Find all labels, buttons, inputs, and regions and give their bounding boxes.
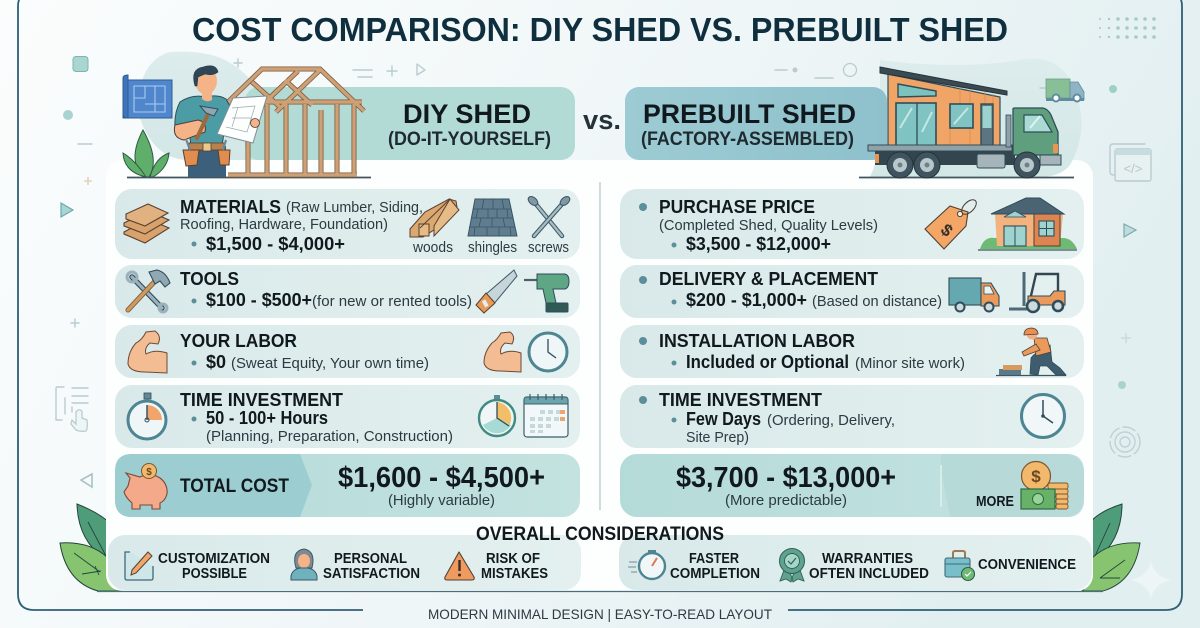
heading: installation: INSTALLATION LABOR	[659, 331, 855, 351]
panel: total cost DIY	[115, 454, 580, 517]
heading: materials: MATERIALS	[180, 197, 281, 217]
text: days detail 2: Site Prep)	[686, 430, 749, 446]
value: installation: Included or Optional	[686, 352, 849, 372]
value: labor: $0	[206, 352, 226, 372]
text: installation detail: (Minor site work)	[855, 356, 965, 372]
heading: overall considerations: OVERALL CONSIDERATIONS	[476, 524, 724, 545]
label: satisfaction: SATISFACTION	[323, 566, 420, 582]
panel: tools	[115, 265, 580, 318]
icon: forklift	[1009, 272, 1065, 312]
text: delivery detail: (Based on distance)	[812, 294, 942, 310]
bullet	[192, 360, 196, 366]
bullet	[672, 242, 676, 248]
vs label: vs.	[583, 105, 621, 135]
icon: small truck	[1040, 79, 1084, 102]
bullet	[192, 416, 196, 422]
label: faster: FASTER	[689, 551, 739, 567]
panel: time investment DIY	[115, 385, 580, 448]
heading: DIY: DIY SHED	[403, 99, 531, 129]
decorative icons right: </>	[1124, 161, 1142, 176]
center divider	[599, 182, 601, 510]
icon: lumber stack	[124, 204, 169, 243]
white content panel	[106, 160, 1093, 591]
icon: calendar	[524, 394, 568, 437]
icon: wrench and hammer	[127, 270, 170, 312]
label: shingles: shingles	[468, 240, 517, 256]
icon: money	[1021, 462, 1068, 509]
label: more: MORE	[976, 494, 1014, 510]
icon: truck	[868, 108, 1061, 178]
value: prebuilt total: $3,700 - $13,000+	[676, 462, 896, 494]
label: mistakes: MISTAKES	[481, 566, 548, 582]
icon: plant	[123, 130, 169, 177]
icon: blueprint	[123, 75, 172, 118]
text: labor detail: (Sweat Equity, Your own time)	[231, 356, 429, 372]
heading: delivery: DELIVERY & PLACEMENT	[659, 269, 878, 289]
icon: clock	[1022, 394, 1064, 438]
icon: clock	[529, 333, 567, 371]
ground line	[127, 176, 371, 178]
bullet	[672, 418, 676, 422]
bullet	[192, 298, 196, 304]
icon: drill	[524, 274, 569, 312]
icon: warning	[445, 552, 474, 580]
icon: piggy bank	[124, 464, 167, 509]
text: hours detail: (Planning, Preparation, Construction)	[206, 429, 453, 445]
subheading: DIY: (DO-IT-YOURSELF)	[388, 129, 551, 150]
icon: flexed arm	[128, 331, 167, 373]
icon: ribbon	[780, 548, 804, 582]
text: materials detail 1: (Raw Lumber, Siding,	[286, 200, 423, 216]
heading: Prebuilt: PREBUILT SHED	[643, 99, 856, 129]
icon: leaves left	[60, 504, 124, 591]
value: tools: $100 - $500+	[206, 290, 312, 310]
panel: your labor	[115, 325, 580, 378]
icon: fast stopwatch	[628, 550, 665, 579]
ground line	[859, 176, 1074, 178]
panel: time investment prebuilt	[620, 385, 1084, 448]
label: risk of: RISK OF	[486, 551, 540, 567]
label: often included: OFTEN INCLUDED	[809, 566, 929, 582]
decorative icons right	[177, 17, 1156, 457]
subheading: Prebuilt: (FACTORY-ASSEMBLED)	[641, 129, 854, 150]
icon: builder	[174, 66, 267, 177]
bullet	[639, 396, 647, 404]
label: screws: screws	[528, 240, 569, 256]
icon: saw	[476, 270, 517, 313]
icon: money: $	[1031, 467, 1041, 486]
footer text: MODERN MINIMAL DESIGN | EASY-TO-READ LAYOUT	[428, 606, 772, 622]
DIY header	[137, 52, 575, 160]
decorative sparkle	[1131, 560, 1171, 600]
illustration: builder with shed frame	[123, 66, 371, 178]
icon: shed frame	[228, 69, 364, 175]
icon: delivery truck	[949, 278, 999, 312]
icon: person	[291, 549, 317, 580]
pill: DIY	[245, 87, 575, 160]
bullet	[672, 360, 676, 366]
panel: prebuilt considerations	[619, 535, 1092, 590]
label: possible: POSSIBLE	[182, 566, 247, 582]
label: completion: COMPLETION	[670, 566, 760, 582]
panel: delivery and placement	[620, 265, 1084, 318]
blob behind truck	[870, 59, 1081, 177]
note: highly variable: (Highly variable)	[388, 493, 495, 509]
icon: woods	[410, 199, 459, 237]
icon: price tag	[925, 197, 979, 249]
decorative icons left	[56, 56, 92, 487]
value: materials: $1,500 - $4,000+	[206, 234, 345, 254]
label: total cost: TOTAL COST	[180, 476, 289, 497]
note: more predictable: (More predictable)	[725, 493, 847, 509]
panel: installation labor	[620, 325, 1084, 378]
icon: bag with check	[945, 551, 974, 580]
icon: piggy bank: $	[146, 467, 152, 478]
icon: notebook and pencil	[125, 552, 153, 580]
label: customization: CUSTOMIZATION	[158, 551, 270, 567]
label: woods: woods	[412, 240, 453, 256]
text: days detail 1: (Ordering, Delivery,	[767, 413, 895, 429]
baseline under considerations	[97, 590, 1103, 592]
heading: your labor: YOUR LABOR	[180, 331, 297, 351]
panel: total cost prebuilt	[620, 454, 1084, 517]
text: tools detail: (for new or rented tools)	[312, 294, 472, 310]
heading: time investment: TIME INVESTMENT	[180, 390, 343, 410]
icon: price tag: $	[937, 220, 957, 241]
value: delivery: $200 - $1,000+	[686, 290, 807, 310]
icon: shingles	[468, 199, 517, 236]
label: personal: PERSONAL	[334, 551, 407, 567]
bullet	[639, 276, 647, 284]
icon: arm	[484, 332, 521, 372]
value: few days: Few Days	[686, 409, 761, 429]
heading: purchase price: PURCHASE PRICE	[659, 197, 815, 217]
Prebuilt header	[625, 59, 1081, 177]
panel: materials	[115, 189, 580, 259]
value: purchase: $3,500 - $12,000+	[686, 234, 831, 254]
value: hours: 50 - 100+ Hours	[206, 408, 328, 428]
icon: shed on truck	[880, 67, 1007, 146]
title: COST COMPARISON: DIY SHED VS. PREBUILT SHED	[192, 11, 1008, 48]
illustration: truck with prebuilt shed	[859, 67, 1084, 178]
bullet	[639, 337, 647, 345]
pill: Prebuilt	[625, 87, 887, 160]
value: DIY total: $1,600 - $4,500+	[338, 462, 545, 494]
bullet	[639, 203, 647, 211]
label: warranties: WARRANTIES	[822, 551, 913, 567]
icon: worker	[996, 328, 1066, 376]
bullet	[192, 242, 196, 246]
text: materials detail 2: Roofing, Hardware, Foundation)	[180, 217, 388, 233]
heading: tools: TOOLS	[180, 269, 239, 289]
panel: DIY considerations	[108, 535, 581, 590]
label: convenience: CONVENIENCE	[978, 557, 1076, 573]
panel: purchase price	[620, 189, 1084, 259]
icon: stopwatch small	[479, 395, 515, 436]
text: purchase detail: (Completed Shed, Quality Levels)	[659, 218, 878, 234]
icon: house	[978, 198, 1077, 250]
icon: screws	[527, 195, 571, 236]
bullet	[672, 300, 676, 304]
heading: time investment: TIME INVESTMENT	[659, 390, 822, 410]
icon: leaves right	[1082, 504, 1140, 591]
icon: stopwatch	[128, 393, 166, 439]
blob behind builder	[137, 52, 258, 160]
